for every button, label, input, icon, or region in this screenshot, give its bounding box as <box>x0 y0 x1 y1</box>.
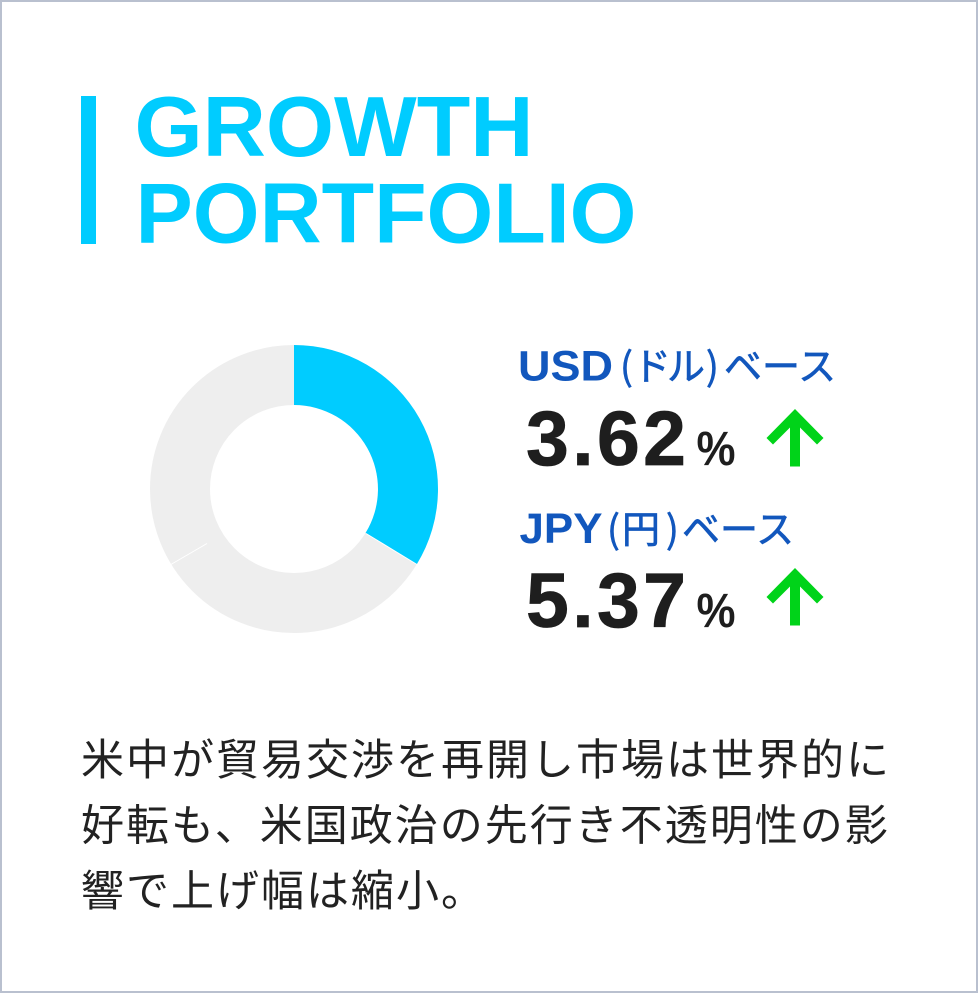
donut segment: grey remainder <box>180 375 408 603</box>
title accent bar <box>81 96 96 244</box>
USD label: ル <box>667 336 705 391</box>
USD value: % <box>696 423 736 476</box>
JPY value: 5.37 <box>526 558 686 644</box>
commentary text <box>81 726 891 919</box>
donut chart <box>170 345 438 603</box>
JPY label: JPY <box>520 505 602 553</box>
JPY label <box>520 499 794 554</box>
icon: up arrow JPY <box>766 568 824 626</box>
commentary text: 米中が貿易交渉を再開し市場は世界的に <box>81 726 891 788</box>
USD label: ( <box>620 336 633 391</box>
JPY value: % <box>696 585 736 638</box>
USD value: 3.62 <box>526 396 686 482</box>
JPY label: ( <box>607 499 620 554</box>
USD label: USD <box>518 342 613 390</box>
USD label: ベース <box>724 336 836 391</box>
USD label: ) <box>706 336 719 391</box>
JPY label: 円 <box>622 499 660 554</box>
donut segment: blue share <box>294 345 438 564</box>
USD label: ド <box>633 336 671 391</box>
title <box>134 80 636 262</box>
icon: up arrow USD <box>766 409 824 466</box>
JPY label: ベース <box>682 499 794 554</box>
commentary text: 響で上げ幅は縮小。 <box>81 857 486 919</box>
title: PORTFOLIO <box>136 166 636 262</box>
JPY label: ) <box>666 499 679 554</box>
USD label <box>518 336 836 391</box>
title: GROWTH <box>134 80 534 175</box>
commentary text: 好転も、米国政治の先行き不透明性の影 <box>81 792 890 854</box>
